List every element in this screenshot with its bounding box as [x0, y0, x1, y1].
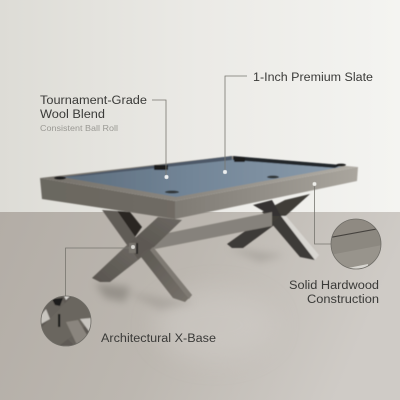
floor shadows: [95, 248, 285, 310]
callout: tournament-grade wool blend: Wool Blend: [40, 109, 105, 121]
callout: 1-inch premium slate: [223, 72, 373, 174]
wall background: [0, 0, 400, 212]
cushion back left: [62, 156, 232, 177]
floor reflection: [155, 290, 275, 360]
callout: 1-inch premium slate: 1-Inch Premium Slate: [253, 72, 373, 84]
table top rail: [40, 156, 358, 201]
leader line: [152, 100, 166, 177]
front X-base leg: [92, 210, 192, 302]
rear X-base leg: [227, 194, 319, 260]
dark cushion back right: [233, 156, 342, 168]
heading: Tournament-Grade: [40, 95, 147, 107]
callout: architectural x-base: [41, 245, 216, 347]
callout: architectural x-base: Architectural X-Base: [101, 333, 216, 345]
table left side apron: [40, 178, 175, 219]
callout: tournament-grade wool blend: [40, 95, 168, 179]
subheading: Consistent Ball Roll: [40, 123, 118, 133]
pool table: [40, 156, 358, 219]
pockets: [54, 157, 346, 194]
felt playing surface: [62, 159, 342, 197]
detail circle: x-base joint: [41, 295, 91, 347]
pool table with base: [40, 156, 358, 302]
detail circle: wood grain: [331, 219, 381, 268]
stretcher beam: [150, 212, 272, 249]
callout: solid hardwood construction: [289, 182, 382, 306]
table right side apron: [175, 167, 358, 219]
callout: solid hardwood construction: Construction: [307, 294, 379, 306]
floor background: [0, 212, 400, 400]
callout: solid hardwood construction: Solid Hardwood: [289, 280, 379, 292]
